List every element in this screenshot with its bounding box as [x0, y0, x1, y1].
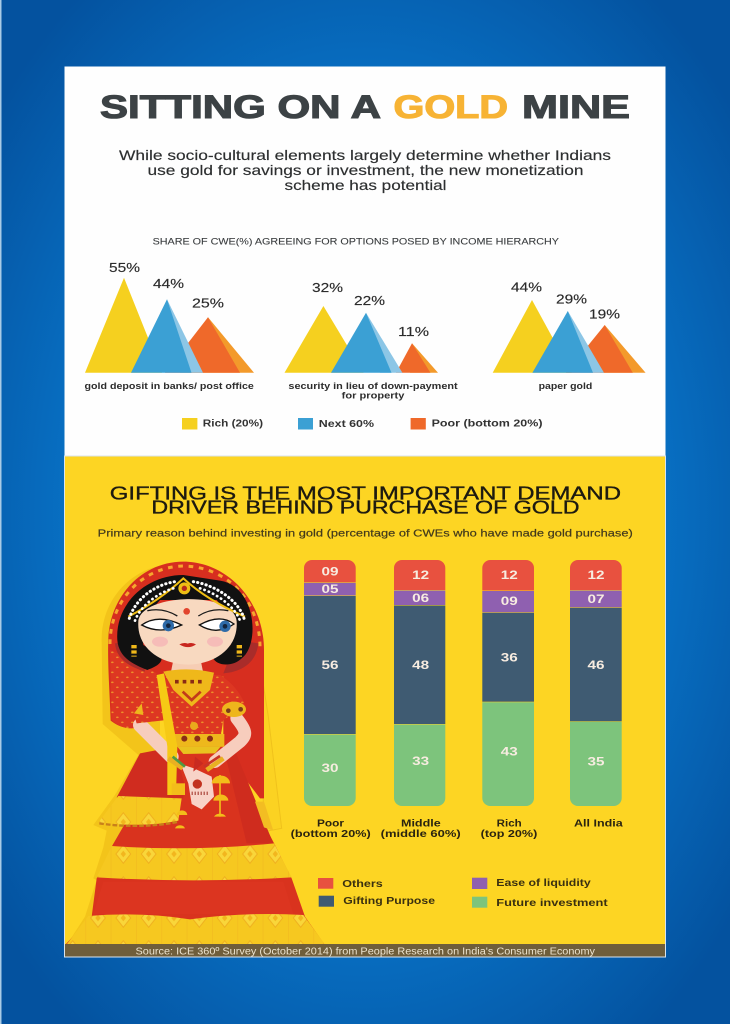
skirt gold bands — [65, 796, 327, 947]
bar: All India: All India — [574, 818, 623, 830]
legend: income groups — [182, 418, 542, 430]
pyramid chart: paper gold: paper gold — [539, 381, 592, 391]
bride shadow — [67, 564, 175, 945]
intro text — [119, 147, 611, 193]
illustration: bride — [65, 562, 327, 947]
pyramid chart: gold deposit in banks/ post office: 44% — [153, 276, 185, 291]
bar: Middle: 12 — [412, 570, 429, 582]
bar: Poor: 09 — [322, 566, 338, 578]
pyramid chart: security in lieu of down-payment: security in lieu of down-payment — [288, 381, 458, 391]
section heading: DRIVER BEHIND PURCHASE OF GOLD — [151, 497, 580, 518]
title: SITTING ON A — [100, 89, 381, 125]
pyramid chart: security in lieu of down-payment: for property — [342, 390, 404, 400]
white panel — [64, 66, 666, 456]
bar: Middle: 48 — [412, 660, 430, 672]
section subheading: Primary reason behind investing in gold (percentage of CWEs who have made gold purchase) — [98, 528, 633, 540]
pyramid chart: gold deposit in banks/ post office: gold deposit in banks/ post office — [84, 381, 254, 391]
bar: Poor — [291, 560, 371, 840]
legend: reasons — [318, 878, 609, 909]
source strip — [65, 944, 665, 958]
source strip: Source: ICE 360º Survey (October 2014) from People Research on India's Consumer Economy — [136, 946, 595, 958]
legend: reasons: Gifting Purpose — [343, 896, 436, 907]
bar: Rich: 09 — [501, 596, 518, 608]
bar: Rich: Rich — [497, 818, 522, 830]
bar: All India: 12 — [588, 570, 604, 582]
pyramid chart: gold deposit in banks/ post office: 25% — [192, 296, 225, 310]
pyramid chart: security in lieu of down-payment: 11% — [398, 324, 430, 339]
legend: reasons: Others — [342, 879, 383, 890]
bar: All India — [570, 560, 623, 830]
bar: Rich: 36 — [501, 652, 518, 664]
pyramid chart: gold deposit in banks/ post office — [84, 260, 254, 391]
title — [100, 89, 630, 125]
bar: Middle: Middle — [401, 818, 441, 830]
yellow panel — [64, 456, 666, 957]
sash — [157, 673, 177, 795]
bar: Middle: (middle 60%) — [381, 829, 461, 840]
pyramid chart: security in lieu of down-payment: 22% — [354, 293, 386, 308]
bar: Poor: 05 — [322, 584, 339, 596]
pyramid chart: gold deposit in banks/ post office: 55% — [109, 260, 141, 275]
bar: Rich: 12 — [501, 570, 518, 582]
bar: Middle: 06 — [412, 593, 429, 605]
section heading: GIFTING IS THE MOST IMPORTANT DEMAND — [110, 482, 621, 503]
blouse — [134, 675, 246, 754]
bar: Poor: (bottom 20%) — [291, 829, 371, 840]
bar: All India: 35 — [588, 756, 605, 768]
bar: Middle: 33 — [412, 756, 429, 768]
skirt — [65, 747, 325, 945]
bar: Rich: (top 20%) — [481, 829, 537, 840]
necklace — [163, 669, 214, 707]
bar: Rich — [481, 560, 537, 840]
pyramid chart: paper gold: 44% — [511, 280, 543, 295]
pyramid chart: paper gold: 19% — [589, 306, 621, 322]
legend: income groups: Rich (20%) — [203, 419, 263, 430]
title: GOLD — [394, 89, 508, 125]
intro text: use gold for savings or investment, the new monetization — [148, 162, 584, 178]
legend: income groups: Poor (bottom 20%) — [432, 419, 542, 430]
arms — [140, 718, 245, 762]
intro text: scheme has potential — [284, 177, 446, 193]
pyramid chart: security in lieu of down-payment — [284, 280, 458, 400]
head jewellery — [128, 578, 245, 657]
pyramid chart: paper gold: 29% — [556, 292, 588, 307]
bar: Rich: 43 — [501, 746, 518, 758]
bar: All India: 46 — [588, 660, 604, 672]
pyramid chart: security in lieu of down-payment: 32% — [312, 280, 344, 295]
bar: Poor: 30 — [322, 763, 338, 775]
hands and bangles — [168, 756, 223, 809]
intro text: While socio-cultural elements largely determine whether Indians — [119, 147, 611, 163]
bar: Middle — [381, 560, 461, 840]
legend: reasons: Future investment — [496, 898, 609, 909]
face — [138, 599, 237, 665]
hair — [117, 575, 253, 670]
legend: income groups: Next 60% — [319, 419, 374, 430]
tassels — [172, 775, 230, 828]
section heading — [110, 482, 621, 518]
chart heading: SHARE OF CWE(%) AGREEING FOR OPTIONS POSED BY INCOME HIERARCHY — [153, 237, 560, 248]
legend: reasons: Ease of liquidity — [496, 878, 591, 889]
bar: All India: 07 — [588, 594, 604, 606]
bar: Poor: 56 — [322, 660, 338, 672]
sheer veil edge — [260, 663, 282, 832]
pyramid chart: paper gold — [493, 280, 646, 391]
bar: Poor: Poor — [317, 818, 344, 830]
title: MINE — [522, 89, 630, 125]
veil — [108, 562, 264, 798]
neck — [170, 660, 204, 677]
